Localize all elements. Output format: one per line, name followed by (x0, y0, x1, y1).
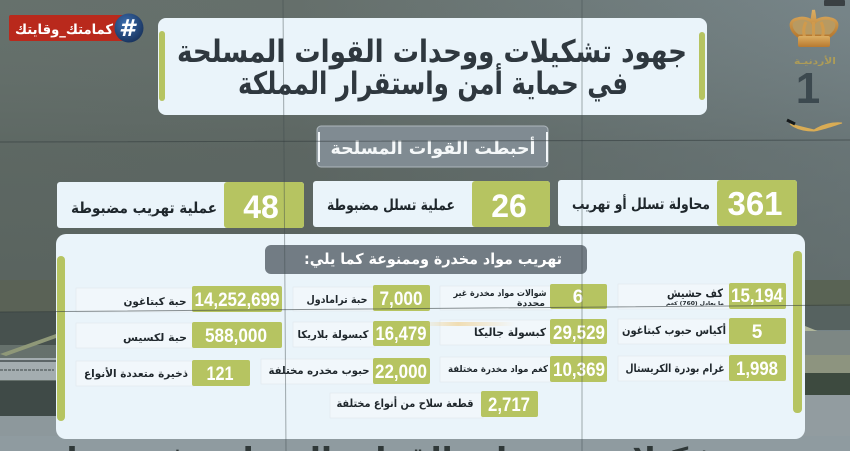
item: 6 (440, 284, 607, 310)
item: 121: ذخيرة متعددة الأنواع (84, 367, 189, 380)
item: 7,000 (293, 285, 430, 311)
stat card: 48: عملية تهريب مضبوطة (71, 199, 217, 217)
item: 22,000: حبوب مخدره مختلفة (268, 365, 370, 377)
item: 29,529 (440, 319, 607, 345)
item: 7,000: حبة ترامادول (306, 294, 368, 306)
item: 15,194 (618, 283, 786, 309)
item: 5: 5 (752, 322, 763, 343)
channel logo: 1 (796, 64, 820, 113)
item: 14,252,699: حبة كبتاغون (124, 296, 186, 308)
icon: crown (791, 10, 837, 47)
item: 14,252,699: 14,252,699 (194, 290, 280, 311)
badge: hashtag: # (119, 16, 137, 42)
stat card: 48 (57, 182, 304, 228)
item: 1,998: 1,998 (736, 359, 778, 380)
item: 5: أكياس حبوب كبتاغون (622, 323, 726, 337)
stat card: 361: محاولة تسلل أو تهريب (572, 194, 710, 213)
item: 15,194: ما يعادل (760) كغم (666, 301, 724, 307)
item: 588,000: حبة لكسيس (123, 332, 187, 344)
stat card: 48: 48 (243, 189, 279, 225)
title card: في حماية أمن واستقرار المملكة (238, 63, 628, 102)
item: 16,479: 16,479 (376, 324, 426, 345)
item: 5 (618, 318, 786, 344)
channel logo: الأردنيـة (794, 55, 836, 67)
item: 16,479: كبسولة بلاريكا (298, 329, 369, 341)
stat card: 361: 361 (727, 185, 783, 222)
title: جهود تشكيلات ووحدات القوات المسلحة (177, 34, 687, 70)
badge: hashtag: كمامتك_وقايتك (15, 22, 114, 38)
panel: smuggling details (56, 234, 805, 439)
item: 1,998 (618, 355, 786, 381)
item: 7,000: 7,000 (380, 289, 422, 310)
item: 22,000 (261, 358, 430, 384)
stat card: 26: 26 (491, 188, 527, 224)
item: 6: محددة (517, 299, 545, 309)
item: 6: شوالات مواد مخدرة غير (453, 289, 547, 299)
title card (158, 18, 707, 115)
stat card: 26 (313, 181, 550, 227)
badge: hashtag (9, 14, 144, 42)
item: 16,479 (293, 321, 430, 347)
channel logo (787, 10, 842, 131)
item: 2,717 (330, 391, 538, 418)
item: 121 (76, 360, 250, 386)
item: 2,717: قطعة سلاح من أنواع مختلفة (336, 396, 474, 410)
subtitle box (317, 126, 548, 167)
item: 14,252,699 (76, 286, 282, 312)
panel heading (265, 245, 587, 274)
item: 2,717: 2,717 (488, 395, 530, 416)
stat card: 26: عملية تسلل مضبوطة (327, 196, 455, 214)
subtitle box: أحبطت القوات المسلحة (330, 137, 536, 159)
item: 29,529: 29,529 (553, 323, 605, 344)
item: 10,369: كغم مواد مخدرة مختلفة (448, 364, 548, 375)
item: 121: 121 (206, 364, 234, 385)
item: 588,000 (76, 322, 282, 348)
item: 588,000: 588,000 (205, 326, 267, 347)
item: 22,000: 22,000 (375, 362, 427, 383)
item: 6: 6 (573, 287, 583, 308)
item: 29,529: كبسولة جاليكا (474, 326, 547, 339)
item: 15,194: كف حشيش (667, 286, 723, 300)
icon: gold swoosh (787, 120, 842, 131)
item: 10,369: 10,369 (553, 360, 605, 381)
panel heading: تهريب مواد مخدرة وممنوعة كما يلي: (304, 250, 562, 268)
stat card: 361 (558, 180, 797, 226)
item: 15,194: 15,194 (731, 286, 783, 307)
item: 10,369 (440, 356, 607, 382)
item: 1,998: غرام بودرة الكريستال (626, 362, 724, 375)
